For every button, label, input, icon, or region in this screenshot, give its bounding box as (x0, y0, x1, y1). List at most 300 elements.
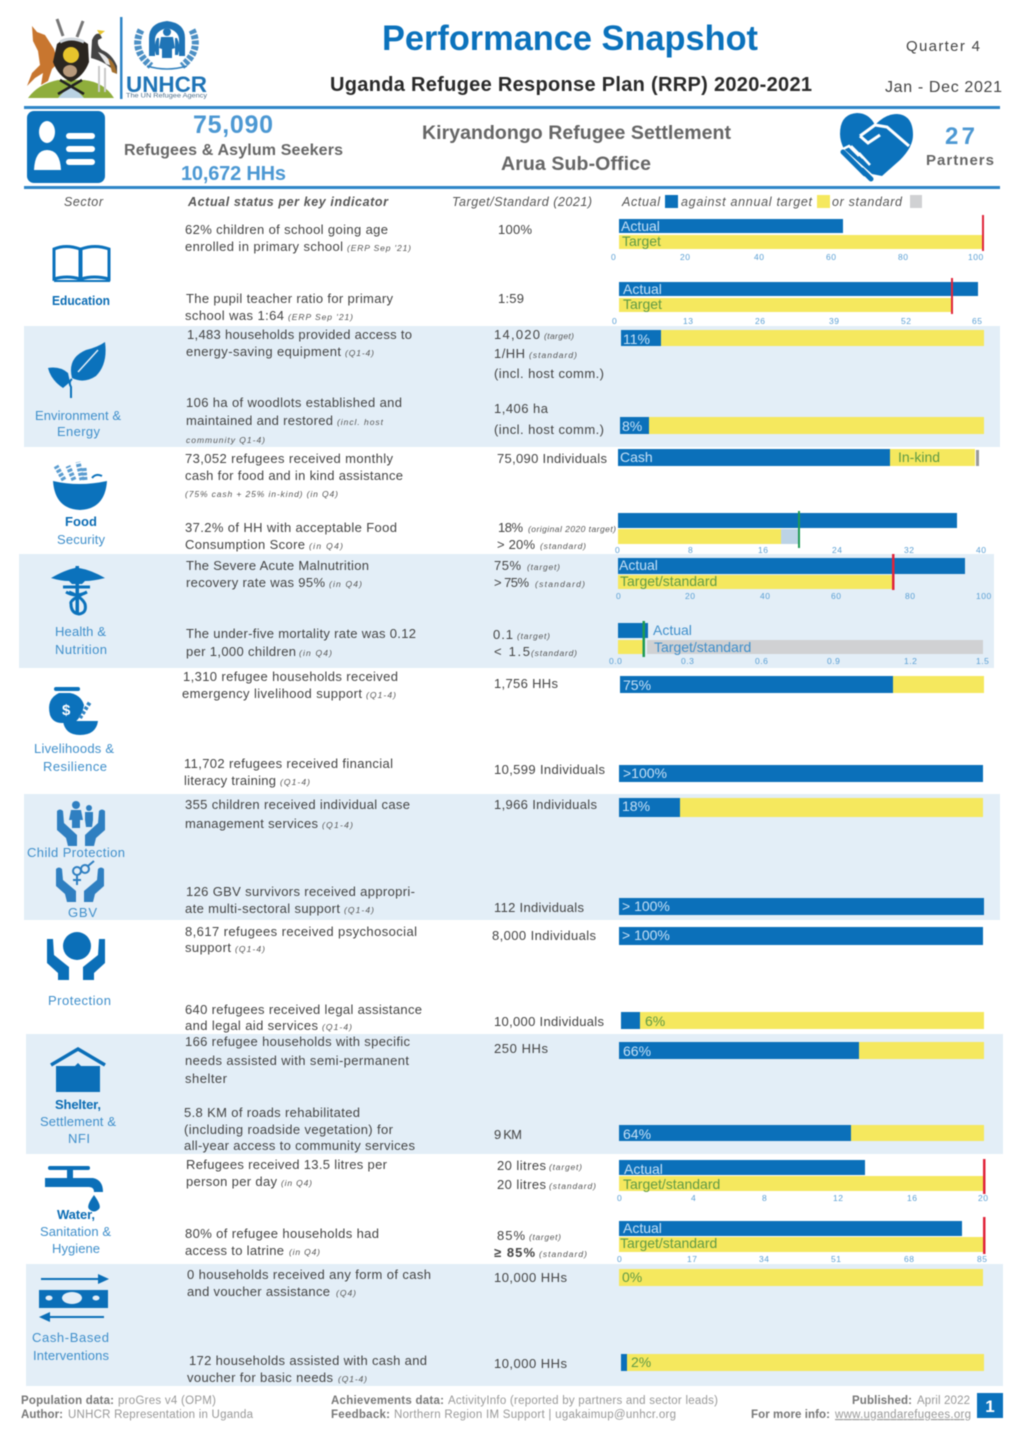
icon: UNHCR logo: The UN Refugee Agency (126, 94, 207, 100)
chart: energy-saving (621, 330, 984, 347)
indicator: energy-saving: (Q1-4) (345, 348, 374, 358)
chart: cash and in-kind (618, 449, 979, 466)
indicator: semi-permanent shelter: needs assisted with semi-permanent (185, 1053, 409, 1068)
chart: litres per day: 8 (762, 1193, 767, 1203)
chart: energy-saving: 11% (623, 331, 650, 347)
icon: hands with gender symbols (56, 861, 104, 902)
icon: UNHCR logo: UNHCR (126, 72, 207, 97)
footer: data sources: proGres v4 (OPM) (118, 1395, 216, 1407)
chart: pupil teacher ratio: Actual (623, 281, 662, 297)
chart: legal assistance (621, 1012, 984, 1029)
icon: money bag and bowl: $ (62, 702, 71, 719)
chart: litres per day: Target/standard (623, 1176, 720, 1192)
indicator: financial literacy: literacy training (184, 773, 276, 788)
indicator: acute malnutrition: 75% (494, 558, 521, 573)
panel: education (24, 214, 1000, 326)
sector label: Environment & (35, 408, 121, 423)
indicator: latrine access: 80% of refugee households had (185, 1226, 379, 1241)
chart: under-five mortality: 0.0 (609, 656, 622, 666)
chart: cash and in-kind: Cash (620, 449, 653, 465)
indicator: energy-saving: (target) (544, 331, 574, 341)
indicator: woodlots: 1,406 ha (494, 401, 549, 416)
indicator: emergency livelihood: emergency livelihood support (182, 686, 362, 701)
indicator: basic needs: (Q1-4) (338, 1374, 367, 1384)
chart: pupil teacher ratio: 13 (683, 316, 693, 326)
sector label: Child Protection (27, 845, 125, 860)
indicator: food consumption: Consumption Score (185, 537, 305, 552)
indicator: roads: 9 KM (494, 1127, 522, 1142)
chart: under-five mortality: 0.6 (755, 656, 768, 666)
chart: under-five mortality: Actual (653, 622, 692, 638)
chart: under-five mortality (609, 621, 989, 666)
chart: child case management: 18% (622, 798, 650, 814)
chart: acute malnutrition: 100 (976, 591, 992, 601)
footer: achievements and feedback: Feedback: (331, 1409, 390, 1421)
sector label: Cash-Based (32, 1330, 109, 1345)
indicator: woodlots: (incl. host (337, 417, 384, 427)
indicator: pupil teacher ratio: school was 1:64 (185, 308, 284, 323)
chart: pupil teacher ratio: 0 (612, 316, 617, 326)
chart: basic needs: 2% (631, 1354, 651, 1370)
indicator: semi-permanent shelter: 250 HHs (494, 1041, 548, 1056)
settlement name: Kiryandongo Refugee Settlement (422, 122, 732, 144)
indicator: financial literacy: 10,599 Individuals (494, 762, 606, 777)
sub-office: Arua Sub-Office (501, 153, 651, 175)
footer: achievements and feedback: Achievements data: (331, 1395, 444, 1407)
panel: environment and energy (24, 326, 1000, 447)
icon: book (54, 246, 110, 281)
indicator: pupil teacher ratio: 1:59 (498, 291, 524, 306)
indicator: emergency livelihood: 1,310 refugee households received (183, 669, 398, 684)
indicator: food consumption (185, 520, 616, 552)
chart: semi-permanent shelter (619, 1042, 984, 1059)
sector label (55, 624, 107, 657)
indicator: food consumption: (in Q4) (309, 541, 343, 551)
indicator: psychosocial support (185, 924, 596, 955)
indicator: food consumption: (standard) (540, 541, 586, 551)
chart: acute malnutrition: 20 (685, 591, 695, 601)
indicator: acute malnutrition: (in Q4) (329, 579, 362, 589)
indicator: emergency livelihood (182, 669, 558, 701)
indicator: under-five mortality: The under-five mortality rate was 0.12 (186, 626, 416, 641)
chart: under-five mortality: 1.5 (976, 656, 989, 666)
indicator: emergency livelihood: 1,756 HHs (494, 676, 558, 691)
chart: food consumption: 40 (976, 545, 986, 555)
indicator: psychosocial support: 8,000 Individuals (492, 928, 596, 943)
chart: under-five mortality: Target/standard (654, 639, 751, 655)
indicator: energy-saving: 1/HH (494, 346, 525, 361)
indicator: acute malnutrition (186, 558, 585, 590)
chart: enrolment: 40 (754, 252, 764, 262)
sector label: Health & (55, 624, 106, 639)
indicator: food consumption: 18% (498, 520, 523, 535)
indicator: basic needs: 10,000 HHs (494, 1356, 568, 1371)
panel: water, sanitation and hygiene (24, 1154, 1000, 1264)
sector label: GBV (68, 905, 97, 920)
indicator: latrine access: 85% (497, 1228, 525, 1243)
indicator: food assistance: 73,052 refugees received monthly (185, 451, 394, 466)
indicator: latrine access: ≥ 85% (494, 1245, 535, 1260)
chart: acute malnutrition: 40 (760, 591, 770, 601)
sector label (40, 1207, 111, 1256)
sector label (35, 408, 121, 439)
table header: Actual (621, 195, 661, 209)
indicator: food assistance: 75,090 Individuals (497, 451, 608, 466)
chart: cash and in-kind: In-kind (898, 449, 940, 465)
households count: 10,672 HHs (181, 163, 286, 185)
indicator: child case management: (Q1-4) (322, 820, 353, 830)
icon: bowl with grain (53, 462, 107, 510)
table header: or standard (832, 195, 903, 209)
sector label (57, 514, 106, 547)
sector label: Shelter, (55, 1097, 101, 1112)
footer: publication info: www.ugandarefugees.org (834, 1409, 971, 1421)
indicator: under-five mortality: (target) (517, 631, 550, 641)
indicator: basic needs: 172 households assisted with cash and (189, 1353, 427, 1368)
indicator: woodlots: community Q1-4) (186, 435, 265, 445)
indicator: cash and voucher: (Q4) (336, 1288, 356, 1298)
indicator: psychosocial support: support (185, 940, 231, 955)
chart: pupil teacher ratio: 26 (755, 316, 765, 326)
indicator: legal assistance: 10,000 Individuals (494, 1014, 604, 1029)
indicator: legal assistance (185, 1002, 604, 1033)
indicator: acute malnutrition: (standard) (535, 579, 585, 589)
indicator: roads (184, 1105, 522, 1153)
sector label: Education (52, 293, 110, 308)
indicator: latrine access: (target) (529, 1232, 561, 1242)
panel: cash-based interventions (26, 1264, 1003, 1386)
sector label: Hygiene (52, 1241, 100, 1256)
sector label: NFI (68, 1131, 90, 1146)
chart: enrolment: 0 (611, 252, 616, 262)
sector label: Interventions (33, 1348, 110, 1363)
chart: latrine access: 51 (831, 1254, 841, 1264)
indicator: cash and voucher: 10,000 HHs (494, 1270, 568, 1285)
indicator: enrolment (185, 222, 532, 254)
indicator: psychosocial support: (Q1-4) (235, 944, 265, 954)
indicator: semi-permanent shelter: shelter (185, 1071, 228, 1086)
page number (977, 1393, 1003, 1418)
footer: achievements and feedback: Northern Region IM Support | ugakaimup@unhcr.org (394, 1409, 676, 1421)
title: Performance Snapshot (382, 19, 758, 58)
indicator: psychosocial support: 8,617 refugees received psychosocial (185, 924, 417, 939)
indicator: acute malnutrition: > 75% (494, 575, 529, 590)
indicator: pupil teacher ratio (185, 291, 524, 323)
chart: latrine access: Actual (623, 1220, 662, 1236)
indicator: energy-saving: energy-saving equipment (186, 344, 341, 359)
chart: under-five mortality: 0.9 (827, 656, 840, 666)
indicator: energy-saving: (standard) (529, 350, 577, 360)
indicator: cash and voucher (187, 1267, 568, 1299)
indicator: under-five mortality: (in Q4) (299, 648, 332, 658)
indicator: under-five mortality: < 1.5 (494, 644, 530, 659)
icon: handshake heart (840, 113, 913, 179)
indicator: under-five mortality: per 1,000 children (186, 644, 296, 659)
indicator: roads: 5.8 KM of roads rehabilitated (184, 1105, 360, 1120)
chart: psychosocial support (619, 927, 983, 945)
chart: roads (619, 1125, 984, 1142)
indicator: woodlots (186, 395, 604, 445)
partners count: 27 (945, 123, 975, 150)
indicator: legal assistance: (Q1-4) (322, 1022, 352, 1032)
indicator: roads: (including roadside vegetation) for (184, 1122, 394, 1137)
indicator: roads: all-year access to community services (184, 1138, 416, 1153)
population count: 75,090 (193, 111, 273, 139)
indicator: woodlots: (incl. host comm.) (494, 422, 604, 437)
chart: semi-permanent shelter: 66% (623, 1043, 651, 1059)
sector label: Protection (48, 993, 111, 1008)
icon: Uganda coat of arms (27, 19, 117, 98)
indicator: food assistance: cash for food and in kind assistance (185, 468, 403, 483)
chart: latrine access: 34 (759, 1254, 769, 1264)
footer: achievements and feedback (331, 1395, 718, 1421)
indicator: under-five mortality (186, 626, 577, 659)
icon: leaves (48, 342, 106, 398)
indicator: financial literacy: 11,702 refugees received financial (184, 756, 393, 771)
chart: GBV survivors (619, 898, 984, 915)
icon: hands with globe (47, 932, 105, 980)
chart: enrolment: Target (622, 233, 661, 249)
sector label: Settlement & (40, 1114, 116, 1129)
indicator: GBV survivors: (Q1-4) (344, 905, 374, 915)
chart: food consumption (615, 511, 986, 555)
footer: publication info: Published: (852, 1395, 912, 1407)
chart: psychosocial support: > 100% (622, 927, 670, 943)
chart: cash and voucher (619, 1269, 983, 1286)
icon: banknote and arrows (39, 1274, 109, 1322)
footer: publication info: For more info: (751, 1409, 830, 1421)
quarter: Quarter 4 (906, 38, 980, 55)
indicator: enrolment: 62% children of school going age (185, 222, 388, 237)
indicator: enrolment: enrolled in primary school (185, 239, 343, 254)
indicator: pupil teacher ratio: (ERP Sep '21) (288, 312, 353, 322)
indicator: litres per day: (standard) (549, 1181, 596, 1191)
chart: food consumption: 8 (688, 545, 693, 555)
chart: financial literacy: >100% (623, 765, 667, 781)
chart: latrine access: Target/standard (620, 1235, 717, 1251)
indicator: legal assistance: 640 refugees received legal assistance (185, 1002, 422, 1017)
indicator: acute malnutrition: The Severe Acute Malnutrition (186, 558, 369, 573)
chart: latrine access: 0 (617, 1254, 622, 1264)
indicator: litres per day: 20 litres (497, 1177, 546, 1192)
indicator: litres per day (186, 1157, 596, 1192)
population label: Refugees & Asylum Seekers (124, 142, 343, 159)
icon: tap and droplet (45, 1166, 103, 1212)
indicator: food consumption: 37.2% of HH with acceptable Food (185, 520, 397, 535)
chart: acute malnutrition: Actual (619, 557, 658, 573)
indicator: food assistance (185, 451, 608, 499)
indicator: GBV survivors (185, 884, 584, 916)
chart: pupil teacher ratio (612, 278, 982, 326)
chart: acute malnutrition: 0 (616, 591, 621, 601)
chart: under-five mortality: 0.3 (681, 656, 694, 666)
sector label (40, 1097, 116, 1146)
chart: under-five mortality: 1.2 (904, 656, 917, 666)
panel: shelter, settlement and NFI (26, 1034, 1003, 1154)
period: Jan - Dec 2021 (885, 79, 1002, 96)
footer: publication info (751, 1395, 971, 1421)
indicator: litres per day: 20 litres (497, 1158, 546, 1173)
indicator: semi-permanent shelter: 166 refugee households with specific (185, 1034, 410, 1049)
sector label (34, 741, 114, 774)
indicator: litres per day: person per day (186, 1174, 278, 1189)
indicator: food assistance: (75% cash + 25% in-kind) (in Q4) (185, 489, 338, 499)
chart: child case management (619, 798, 983, 817)
chart: acute malnutrition: 80 (905, 591, 915, 601)
indicator: financial literacy: (Q1-4) (280, 777, 310, 787)
panel: food security (24, 447, 1000, 555)
footer: achievements and feedback: ActivityInfo (reported by partners and sector leads) (448, 1395, 718, 1407)
indicator: litres per day: Refugees received 13.5 litres per (186, 1157, 388, 1172)
chart: pupil teacher ratio: 39 (829, 316, 839, 326)
sector label: Food (65, 514, 97, 529)
page number: 1 (985, 1397, 995, 1416)
table header: Actual status per key indicator (187, 195, 389, 209)
chart: food consumption: 32 (904, 545, 914, 555)
chart: pupil teacher ratio: 52 (901, 316, 911, 326)
sector label: Nutrition (55, 642, 107, 657)
subtitle: Uganda Refugee Response Plan (RRP) 2020-2021 (330, 74, 812, 96)
panel: health and nutrition (19, 554, 994, 668)
footer: publication info: April 2022 (917, 1395, 970, 1407)
chart: enrolment: Actual (621, 218, 660, 234)
indicator: child case management (185, 797, 598, 831)
indicator: basic needs: voucher for basic needs (187, 1370, 334, 1385)
footer: data sources: Author: (21, 1409, 63, 1421)
icon: hands with children (57, 801, 105, 846)
footer: data sources: UNHCR Representation in Uganda (68, 1409, 254, 1421)
chart: pupil teacher ratio: 65 (972, 316, 982, 326)
panel: livelihoods and resilience (24, 668, 1000, 794)
divider (120, 17, 122, 99)
sector label (32, 1330, 110, 1363)
indicator: GBV survivors: ate multi-sectoral support (185, 901, 340, 916)
panel: protection (24, 920, 1000, 1034)
panel: child protection and GBV (24, 794, 1000, 920)
chart: woodlots: 8% (622, 418, 642, 434)
chart: latrine access (617, 1217, 987, 1264)
footer: data sources (21, 1395, 254, 1421)
indicator: child case management: management services (185, 816, 318, 831)
icon: house (51, 1049, 105, 1092)
chart: litres per day: Actual (624, 1161, 663, 1177)
header (27, 17, 1002, 100)
chart: enrolment: 60 (826, 252, 836, 262)
chart: latrine access: 85 (977, 1254, 987, 1264)
chart: GBV survivors: > 100% (622, 898, 670, 914)
indicator: latrine access: access to latrine (185, 1243, 284, 1258)
indicator: cash and voucher: 0 households received any form of cash (187, 1267, 431, 1282)
chart: latrine access: 68 (904, 1254, 914, 1264)
sector label: Resilience (43, 759, 107, 774)
indicator: latrine access: (standard) (539, 1249, 587, 1259)
chart: acute malnutrition (616, 554, 992, 601)
sector label: Energy (57, 424, 100, 439)
indicator: acute malnutrition: recovery rate was 95% (186, 575, 325, 590)
chart: cash and voucher: 0% (622, 1269, 642, 1285)
table header (64, 195, 922, 209)
indicator: litres per day: (target) (549, 1162, 582, 1172)
indicator: enrolment: (ERP Sep '21) (347, 243, 411, 253)
indicator: basic needs (187, 1353, 568, 1385)
chart: enrolment: 80 (898, 252, 908, 262)
key figures banner (27, 111, 994, 185)
indicator: litres per day: (in Q4) (281, 1178, 312, 1188)
table header: against annual target (681, 195, 813, 209)
indicator: legal assistance: and legal aid services (185, 1018, 318, 1033)
chart: litres per day (617, 1159, 988, 1203)
sector label: Water, (57, 1207, 95, 1222)
chart: food consumption: 16 (758, 545, 768, 555)
chart: emergency livelihood (620, 676, 984, 693)
icon: money bag and bowl (49, 687, 98, 735)
indicator: financial literacy (184, 756, 606, 788)
indicator: woodlots: 106 ha of woodlots established and (186, 395, 402, 410)
chart: latrine access: 17 (687, 1254, 697, 1264)
chart: enrolment: 100 (968, 252, 984, 262)
icon: caduceus (51, 566, 105, 614)
chart: acute malnutrition: 60 (831, 591, 841, 601)
chart: enrolment: 20 (680, 252, 690, 262)
table header: Target/Standard (2021) (452, 195, 592, 209)
indicator: enrolment: 100% (498, 222, 532, 237)
table header: Sector (64, 195, 104, 209)
indicator: under-five mortality: (standard) (531, 648, 577, 658)
indicator: latrine access: (in Q4) (289, 1247, 320, 1257)
chart: food consumption: 0 (615, 545, 620, 555)
indicator: energy-saving: 14,020 (494, 327, 540, 342)
indicator: cash and voucher: and voucher assistance (187, 1284, 330, 1299)
chart: litres per day: 4 (691, 1193, 696, 1203)
indicator: energy-saving: 1,483 households provided access to (187, 327, 412, 342)
icon: person ID card (27, 111, 105, 183)
indicator: GBV survivors: 126 GBV survivors received appropri- (186, 884, 415, 899)
footer (21, 1393, 1003, 1421)
chart: financial literacy (619, 765, 983, 782)
indicator: energy-saving (186, 327, 604, 381)
chart: litres per day: 20 (978, 1193, 988, 1203)
chart: litres per day: 12 (833, 1193, 843, 1203)
chart: woodlots (620, 417, 984, 434)
sector label: Security (57, 532, 106, 547)
footer: data sources: Population data: (21, 1395, 114, 1407)
indicator: GBV survivors: 112 Individuals (494, 900, 584, 915)
indicator: woodlots: maintained and restored (186, 413, 333, 428)
icon: UNHCR logo (126, 21, 207, 100)
chart: basic needs (621, 1354, 984, 1371)
indicator: child case management: 1,966 Individuals (494, 797, 598, 812)
sector label: Livelihoods & (34, 741, 114, 756)
indicator: food consumption: > 20% (497, 537, 535, 552)
indicator: energy-saving: (incl. host comm.) (494, 366, 604, 381)
chart: legal assistance: 6% (645, 1013, 665, 1029)
indicator: semi-permanent shelter (185, 1034, 548, 1086)
chart: litres per day: 16 (907, 1193, 917, 1203)
chart: roads: 64% (623, 1126, 651, 1142)
indicator: under-five mortality: 0.1 (493, 627, 513, 642)
indicator: food consumption: (original 2020 target) (528, 524, 616, 534)
chart: litres per day: 0 (617, 1193, 622, 1203)
indicator: emergency livelihood: (Q1-4) (366, 690, 396, 700)
sector label: Sanitation & (40, 1224, 111, 1239)
chart: pupil teacher ratio: Target (623, 296, 662, 312)
chart: emergency livelihood: 75% (623, 677, 651, 693)
indicator: acute malnutrition: (target) (527, 562, 560, 572)
indicator: latrine access (185, 1226, 587, 1260)
chart: enrolment (611, 215, 984, 262)
indicator: child case management: 355 children received individual case (185, 797, 410, 812)
partners label: Partners (926, 152, 994, 169)
